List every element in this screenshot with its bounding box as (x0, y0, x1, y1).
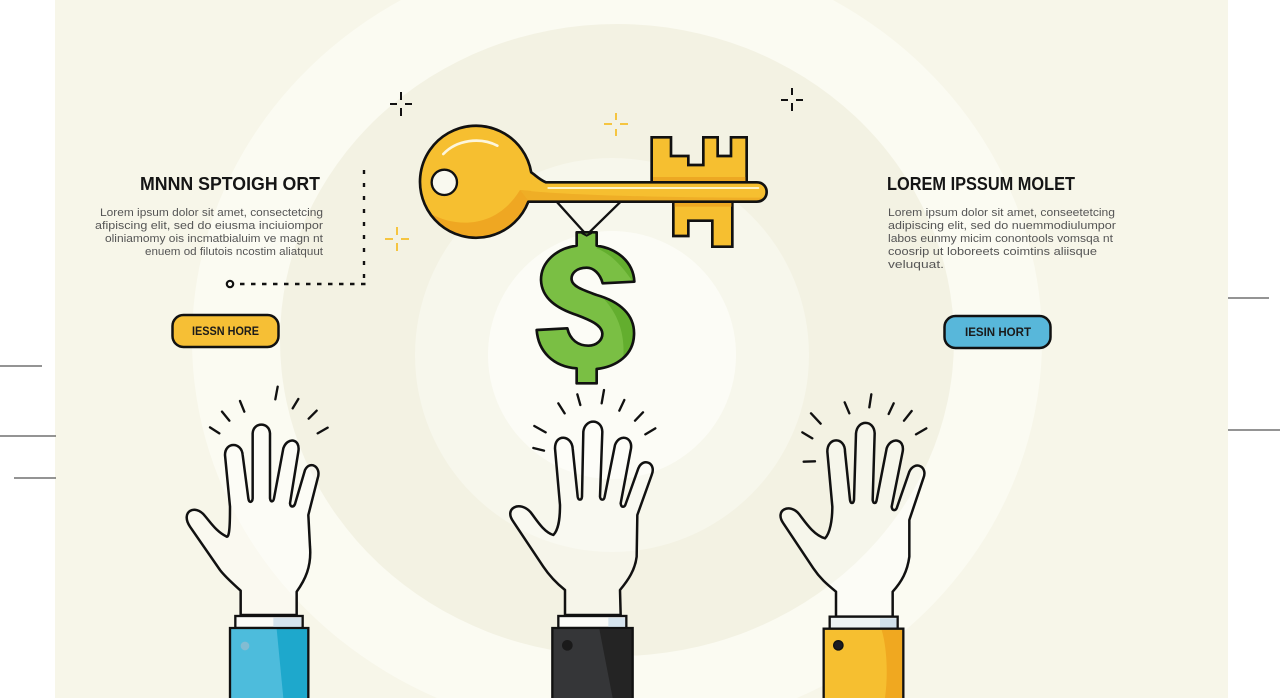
icon: black sparkle right (781, 88, 803, 111)
icon: black sparkle left (390, 92, 412, 116)
cuff (830, 617, 898, 629)
key shaft and head (420, 126, 767, 245)
sleeve (824, 629, 903, 698)
right body text (888, 207, 1116, 271)
icon: key and dollar (420, 126, 767, 383)
right heading: LOREM IPSSUM MOLET (887, 173, 1076, 194)
right button: IESIN HORT (965, 325, 1032, 339)
hand right with yellow sleeve (781, 394, 926, 698)
rays (802, 394, 926, 462)
right body text: veluquat. (888, 259, 944, 271)
rays (533, 390, 655, 451)
cuff (235, 616, 303, 628)
sleeve (230, 628, 308, 698)
left body text: oliniamomy ois incmatbialuim ve magn nt (105, 233, 323, 245)
decorative side lines (0, 298, 1280, 478)
left button (172, 315, 278, 347)
key upper bit (652, 137, 747, 182)
sleeve (552, 628, 633, 698)
right body text: adipiscing elit, sed do nuemmodiulumpor (888, 220, 1116, 232)
strings (557, 202, 621, 235)
left heading: MNNN SPTOIGH ORT (140, 173, 321, 194)
right body text: coosrip ut loboreets coimtins aliisque (888, 246, 1097, 258)
right body text: Lorem ipsum dolor sit amet, conseetetcing (888, 207, 1115, 219)
icon: yellow sparkle top (604, 113, 628, 136)
left body text: afipiscing elit, sed do eiusma inciuiompor (95, 220, 323, 232)
hand outline (510, 422, 653, 615)
hand outline (187, 425, 318, 615)
icon: yellow sparkle left (385, 227, 409, 251)
left body text: enuem od filutois ncostim aliatquut (145, 246, 323, 258)
hand center with black sleeve (510, 390, 655, 698)
rays (210, 387, 328, 433)
dotted connector (227, 170, 367, 287)
key lower bit (673, 202, 732, 247)
hand left with blue sleeve (187, 387, 328, 698)
left body text (95, 207, 323, 258)
cuff (558, 616, 626, 628)
left button: IESSN HORE (192, 324, 259, 338)
hand outline (781, 423, 924, 617)
left body text: Lorem ipsum dolor sit amet, consectetcing (100, 207, 323, 219)
right button (944, 316, 1050, 348)
right body text: labos eunmy micim conontools vomsqa nt (888, 233, 1113, 245)
icon: dollar sign (537, 232, 643, 383)
